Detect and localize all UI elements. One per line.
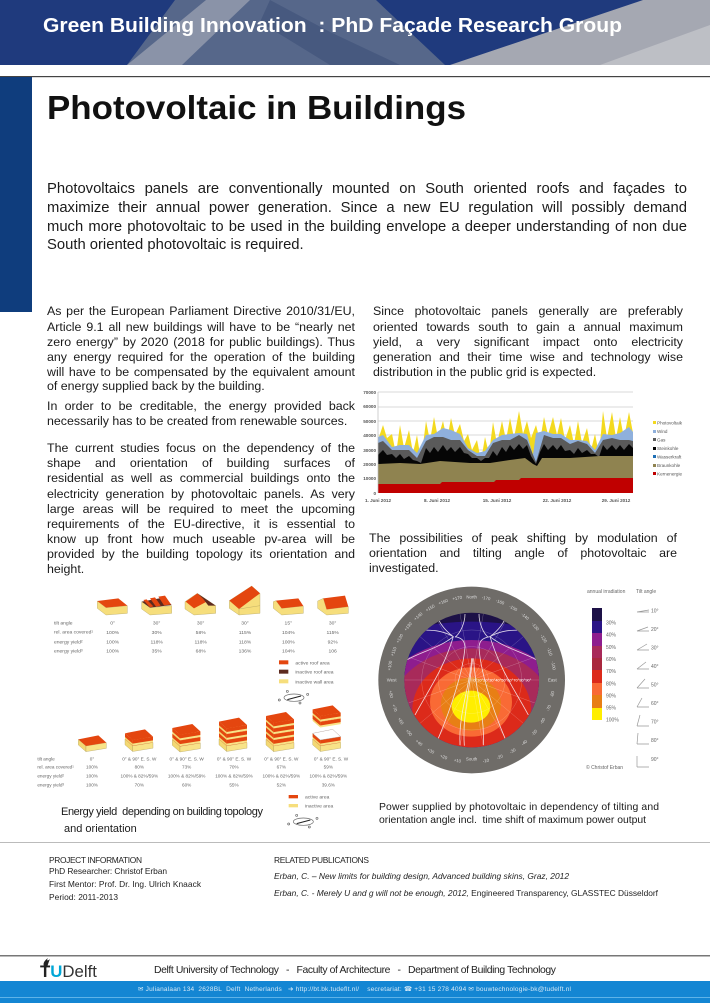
table: stacked floors: 100% (86, 765, 98, 770)
contour lines (407, 614, 537, 746)
irradiation legend: 100% (606, 718, 619, 724)
icon: flat roof building (97, 598, 127, 615)
chart axis labels: 10000 (363, 476, 376, 481)
icon: single storey block (78, 735, 106, 752)
right column text: distribution in the public grid is expected. (373, 365, 596, 379)
table: stacked floors: 52% (277, 783, 286, 788)
project information (49, 855, 202, 902)
ring labels: South (466, 757, 478, 762)
ring labels: +20 (439, 753, 449, 761)
legend: roof areas: active roof area (295, 660, 330, 666)
right column text (373, 304, 683, 379)
table: roof shapes: 30% (152, 630, 162, 636)
chart axis labels: 15. Juni 2012 (483, 498, 512, 503)
ring labels: -10 (482, 757, 490, 764)
tilt angle legend: 40° (651, 664, 659, 670)
left column text: of energy supplied back by the building. (47, 379, 265, 393)
ring labels: East (548, 677, 557, 682)
table: stacked floors: 0° & 90° E. S. W (264, 756, 299, 761)
tilt angle legend: 10° (651, 608, 659, 614)
building topology figure: roof shapes (54, 586, 348, 704)
ring labels: +140 (413, 611, 424, 621)
left column text: zero energy” by 2020 (2018 for public buildings). Thus (47, 335, 355, 349)
left column text: Article 9.1 all new buildings will have to be “nearly net (47, 320, 355, 334)
outer grey ring (378, 587, 565, 773)
left column text: will have to be compensated by the equivalent amount (47, 365, 355, 379)
table: roof shapes: 100% (282, 639, 295, 645)
icon: compass (288, 814, 318, 828)
table: stacked floors: 73% (182, 765, 191, 770)
legend: roof areas: inactive wall area (295, 679, 334, 685)
ring labels: +80 (388, 690, 394, 699)
table: roof shapes: 68% (196, 649, 206, 655)
chart axis labels: 60000 (363, 404, 376, 409)
left column text: residential as well as commercial buildings onto the (47, 471, 355, 485)
table: roof shapes: 115% (326, 630, 339, 636)
ring labels: -110 (546, 647, 554, 657)
table: roof shapes: 35% (152, 649, 162, 655)
chart axis labels: 29. Juni 2012 (602, 498, 631, 503)
ring labels: -170 (481, 595, 491, 601)
table: stacked floors: 80% (135, 765, 144, 770)
ring labels: +10 (453, 757, 462, 764)
irradiation colour bands: 0°10°20°30°40°50°60°70°80°90° (473, 677, 532, 682)
table: stacked floors: 100% & 82%/59% (215, 774, 253, 779)
left column text: know up front how much useable pv-area will be (47, 532, 355, 546)
legend: floors: active area (305, 794, 330, 800)
tilt angle legend: Tilt angle (636, 589, 656, 595)
icon: split block with floating floors (313, 705, 341, 751)
chart axis labels: 1. Juni 2012 (365, 498, 391, 503)
irradiation legend: 40% (606, 632, 617, 638)
icon: three storey block (172, 724, 200, 752)
nuclear layer (378, 478, 633, 493)
chart axis labels: 40000 (363, 433, 376, 438)
caption: power supplied (379, 802, 659, 826)
left column text: any energy required for the operation of the building (47, 350, 355, 364)
related publications: Erban, C. - Merely U and g will not be enough, 2012, Engineered Transparency, GLASSTEC Düsseldorf (274, 888, 659, 898)
ring labels: +50 (405, 728, 414, 737)
ring labels: -140 (520, 612, 530, 621)
ring labels: -100 (550, 661, 557, 671)
table: stacked floors: 0° & 90° E. S. W (122, 756, 157, 761)
table: stacked floors: 100% & 82%/59% (310, 774, 347, 779)
ring labels: -60 (539, 716, 547, 725)
table: roof shapes: 100% (106, 639, 120, 645)
chart legend: Wind (657, 429, 668, 434)
ring labels: -160 (495, 598, 506, 606)
left column text: The current studies focus on the dependency of the (47, 441, 355, 455)
irradiation legend: 50% (606, 645, 617, 651)
icon: gable roof building (185, 593, 216, 615)
table: stacked floors: 70% (135, 783, 144, 788)
left column text: provided by the building topology its orientation and (47, 547, 355, 561)
table: stacked floors: 0° & 90° E. S. W (314, 756, 349, 761)
ring labels: +160 (438, 598, 449, 606)
ring labels: -30 (509, 747, 517, 755)
table: roof shapes: 118% (150, 639, 163, 645)
table: roof shapes: 100% (106, 649, 120, 655)
table: roof shapes: 92% (328, 639, 338, 645)
irradiation legend: 60% (606, 657, 617, 663)
irradiation legend: 90% (606, 694, 617, 700)
wind layer (378, 427, 633, 493)
intro text: South oriented photovoltaic is required. (47, 237, 304, 253)
left column text: large areas will be required to meet the upcoming (47, 502, 355, 516)
chart axis labels: 20000 (363, 462, 376, 467)
photovoltaic layer (378, 411, 633, 493)
table: stacked floors: 67% (277, 765, 286, 770)
table: roof shapes: 104% (282, 649, 295, 655)
divider (0, 842, 710, 843)
icon: high hip roof building (318, 596, 348, 615)
table: stacked floors: 60% (182, 783, 191, 788)
left column text: In order to be creditable, the energy provided back (47, 399, 355, 413)
icon: two storey block (125, 729, 153, 751)
ring labels: North (466, 594, 478, 599)
intro text: maximize their annual power generation. Since a new EU regulation will possibly demand (47, 200, 687, 216)
table: stacked floors: 39.6% (322, 783, 335, 788)
ring labels: +170 (452, 595, 463, 601)
header banner (0, 0, 710, 65)
table: stacked floors: 0° & 90° E. S. W (170, 756, 204, 761)
ring labels: +100 (386, 660, 393, 671)
tilt angle legend: 80° (651, 738, 659, 744)
irradiation legend: 95% (606, 706, 617, 712)
left column text: necessarily has to be created from renewable sources. (47, 414, 347, 428)
table: stacked floors: 55% (229, 783, 239, 788)
tilt angle legend: 90° (651, 757, 659, 763)
table: roof shapes: 100% (106, 630, 120, 636)
table: stacked floors: 100% (86, 783, 98, 788)
legend: floors (289, 794, 333, 809)
tilt angle legend: 20° (651, 627, 659, 633)
project information: First Mentor: Prof. Dr. Ing. Ulrich Knaack (49, 879, 202, 889)
table: stacked floors: 0° & 90° E. S. W (217, 756, 252, 761)
table: stacked floors: 0° (90, 756, 94, 761)
ring labels: +60 (397, 716, 405, 726)
table: stacked floors: energy yield² (37, 774, 64, 779)
caption: energy yield: and orientation (64, 823, 137, 835)
related publications (274, 855, 659, 898)
table: roof shapes (54, 621, 339, 655)
chart legend: Gas (657, 438, 666, 442)
ring labels: -20 (496, 753, 504, 760)
irradiation sun-path diagram (378, 586, 565, 774)
table: stacked floors: 100% & 82%/59% (121, 774, 158, 779)
stacked area chart: electricity generation June 2012 (363, 390, 683, 503)
ring labels: +130 (403, 621, 413, 632)
gas layer (378, 435, 633, 493)
intro text: Photovoltaics panels are conventionally mounted on South oriented roofs and façades to (47, 181, 687, 197)
irradiation legend (586, 589, 626, 771)
ring labels: +30 (426, 747, 436, 755)
table: stacked floors: 100% (86, 774, 98, 779)
left column text (47, 304, 355, 576)
related publications: RELATED PUBLICATIONS (274, 855, 369, 865)
chart axis labels: 70000 (363, 390, 376, 395)
table: roof shapes: 30° (329, 621, 336, 627)
table: stacked floors: 70% (229, 765, 239, 770)
project information: Period: 2011-2013 (49, 892, 118, 902)
project information: PROJECT INFORMATION (49, 855, 142, 865)
ring labels: -120 (539, 633, 548, 644)
table: roof shapes: 115% (239, 630, 252, 636)
caption: energy yield (61, 806, 264, 835)
peak shifting text: orientation and tilting angle of photovoltaic are (369, 546, 677, 560)
irradiation legend: © Christof Erban (586, 764, 623, 771)
icon: low hip roof building (273, 598, 303, 615)
ring labels: +120 (395, 632, 405, 644)
tilt angle legend: 70° (651, 720, 659, 726)
chart axis labels: 0 (373, 491, 376, 496)
irradiation colour bands (404, 612, 539, 748)
irradiation legend: 80% (606, 682, 617, 688)
table: roof shapes: 58% (196, 630, 206, 636)
irradiation legend: 70% (606, 669, 617, 675)
icon: compass (278, 690, 309, 704)
chart axis labels: 22. Juni 2012 (543, 498, 572, 503)
ring labels: +110 (390, 646, 398, 657)
ring labels: -70 (545, 704, 552, 712)
ring labels: +70 (391, 704, 399, 713)
irradiation legend: 30% (606, 620, 617, 626)
main title: Photovoltaic in Buildings (47, 90, 466, 127)
ring labels: +150 (425, 603, 436, 613)
left column text: As per the European Parliament Directive 2010/31/EU, (47, 304, 355, 318)
chart axis labels: 8. Juni 2012 (424, 498, 450, 503)
table: roof shapes: 30° (153, 621, 160, 627)
right column text: generation and their time wise and technology wise (373, 350, 683, 364)
table: roof shapes: energy yield³ (54, 649, 83, 655)
chart legend: Braunkohle (657, 463, 681, 468)
ring labels: West (387, 677, 397, 682)
legend: floors: inactive area (305, 803, 333, 809)
table: stacked floors: tilt angle (37, 756, 55, 761)
legend: roof areas: inactive roof area (295, 670, 334, 676)
chart legend: Kernenergie (657, 472, 682, 476)
chart legend: Steinkohle (657, 446, 679, 451)
table: roof shapes: 106 (328, 649, 337, 655)
left column text: electricity generation by photovoltaic panels. As very (47, 487, 355, 501)
related publications: Erban, C. – New limits for building design, Advanced building skins, Graz, 2012 (274, 871, 569, 881)
footer rule (0, 955, 710, 956)
left column text: shape and orientation of building surfaces of (47, 456, 355, 470)
table: roof shapes: tilt angle (54, 621, 73, 627)
TU Delft logo: TUDelft (40, 962, 97, 981)
left blue accent bar (0, 77, 32, 312)
tilt angle legend: 30° (651, 646, 659, 652)
left column text: requirements of the EU-directive, it is essential to (47, 517, 355, 531)
caption: power supplied: orientation angle incl. time shift of maximum power output (379, 815, 646, 826)
tilt angle legend: 60° (651, 701, 659, 707)
right column text: yield, a very significant impact onto electricity (373, 335, 683, 349)
table: stacked floors: rel. area covered¹ (37, 765, 74, 770)
left column text: height. (47, 562, 84, 576)
header title: Green Building Innovation : PhD Façade Research Group (43, 14, 622, 37)
ring labels: -150 (508, 604, 519, 613)
icon: sawtooth roof building (142, 596, 172, 615)
irradiation legend: annual irradiation (587, 589, 626, 595)
tilt angle legend: 50° (651, 682, 659, 688)
table: roof shapes: 136% (239, 649, 252, 655)
table: roof shapes: rel. area covered¹ (54, 630, 93, 636)
chart axis labels: 50000 (363, 419, 376, 424)
table: roof shapes: 0° (110, 621, 115, 627)
table: roof shapes: 30° (197, 621, 204, 627)
ring labels: -130 (531, 622, 540, 632)
polar grid (404, 614, 539, 746)
footer contact bar (0, 981, 710, 1003)
table: roof shapes: 15° (285, 621, 292, 627)
chart legend (653, 420, 683, 476)
table: roof shapes: 118% (239, 639, 252, 645)
right column text: Since photovoltaic panels generally are preferably (373, 304, 683, 318)
icon: steep mono-pitch building (229, 586, 260, 615)
chart legend: Photovoltaik (657, 420, 683, 426)
lignite layer (378, 456, 633, 493)
header rule (0, 76, 710, 77)
table: roof shapes: energy yield² (54, 639, 83, 645)
table: stacked floors (37, 756, 349, 788)
table: roof shapes: 104% (282, 630, 295, 636)
peak shifting text: investigated. (369, 561, 439, 575)
intro text: much more photovoltaic to be used in the building envelope a deeper understanding of non due (47, 219, 687, 235)
right column text: oriented towards south to gain a annual maximum (373, 320, 683, 334)
building topology figure: stacked floors (37, 705, 349, 828)
intro text (47, 181, 687, 253)
table: stacked floors: energy yield³ (37, 783, 64, 788)
ring labels: -40 (520, 738, 529, 747)
hard coal layer (378, 444, 633, 493)
legend: roof areas (279, 660, 334, 685)
icon: five storey block (266, 712, 294, 752)
chart axis labels: 30000 (363, 448, 376, 453)
caption: energy yield: Energy yield depending on building topology (61, 806, 264, 818)
project information: PhD Researcher: Christof Erban (49, 866, 167, 876)
table: stacked floors: 100% & 82%/59% (168, 774, 205, 779)
chart legend: Wasserkraft (657, 454, 682, 460)
tilt angle legend (636, 589, 659, 767)
peak shifting text (369, 531, 677, 575)
icon: four storey block (219, 718, 247, 751)
peak shifting text: The possibilities of peak shifting by modulation of (369, 531, 677, 545)
table: stacked floors: 100% & 82%/59% (263, 774, 300, 779)
ring labels: -50 (530, 728, 539, 737)
contact details: ✉ Julianalaan 134 2628BL Delft Netherlands ➔ http://bt.bk.tudeflt.nl/ secretariat: ☎ +31 15 278 4094 ✉ bouwtechnologie-bk@tudelft.nl (138, 985, 572, 993)
chart axis labels (363, 390, 631, 503)
table: stacked floors: 59% (324, 765, 333, 770)
table: roof shapes: 118% (194, 639, 207, 645)
footer institution text: Delft University of Technology - Faculty of Architecture - Department of Building Technology (154, 965, 557, 976)
ring labels (386, 594, 557, 764)
ring labels: +40 (415, 738, 424, 747)
icon: flame (44, 958, 50, 968)
ring labels: -80 (549, 690, 555, 698)
table: roof shapes: 30° (241, 621, 249, 627)
caption: power supplied: Power supplied by photovoltaic in dependency of tilting and (379, 802, 659, 813)
